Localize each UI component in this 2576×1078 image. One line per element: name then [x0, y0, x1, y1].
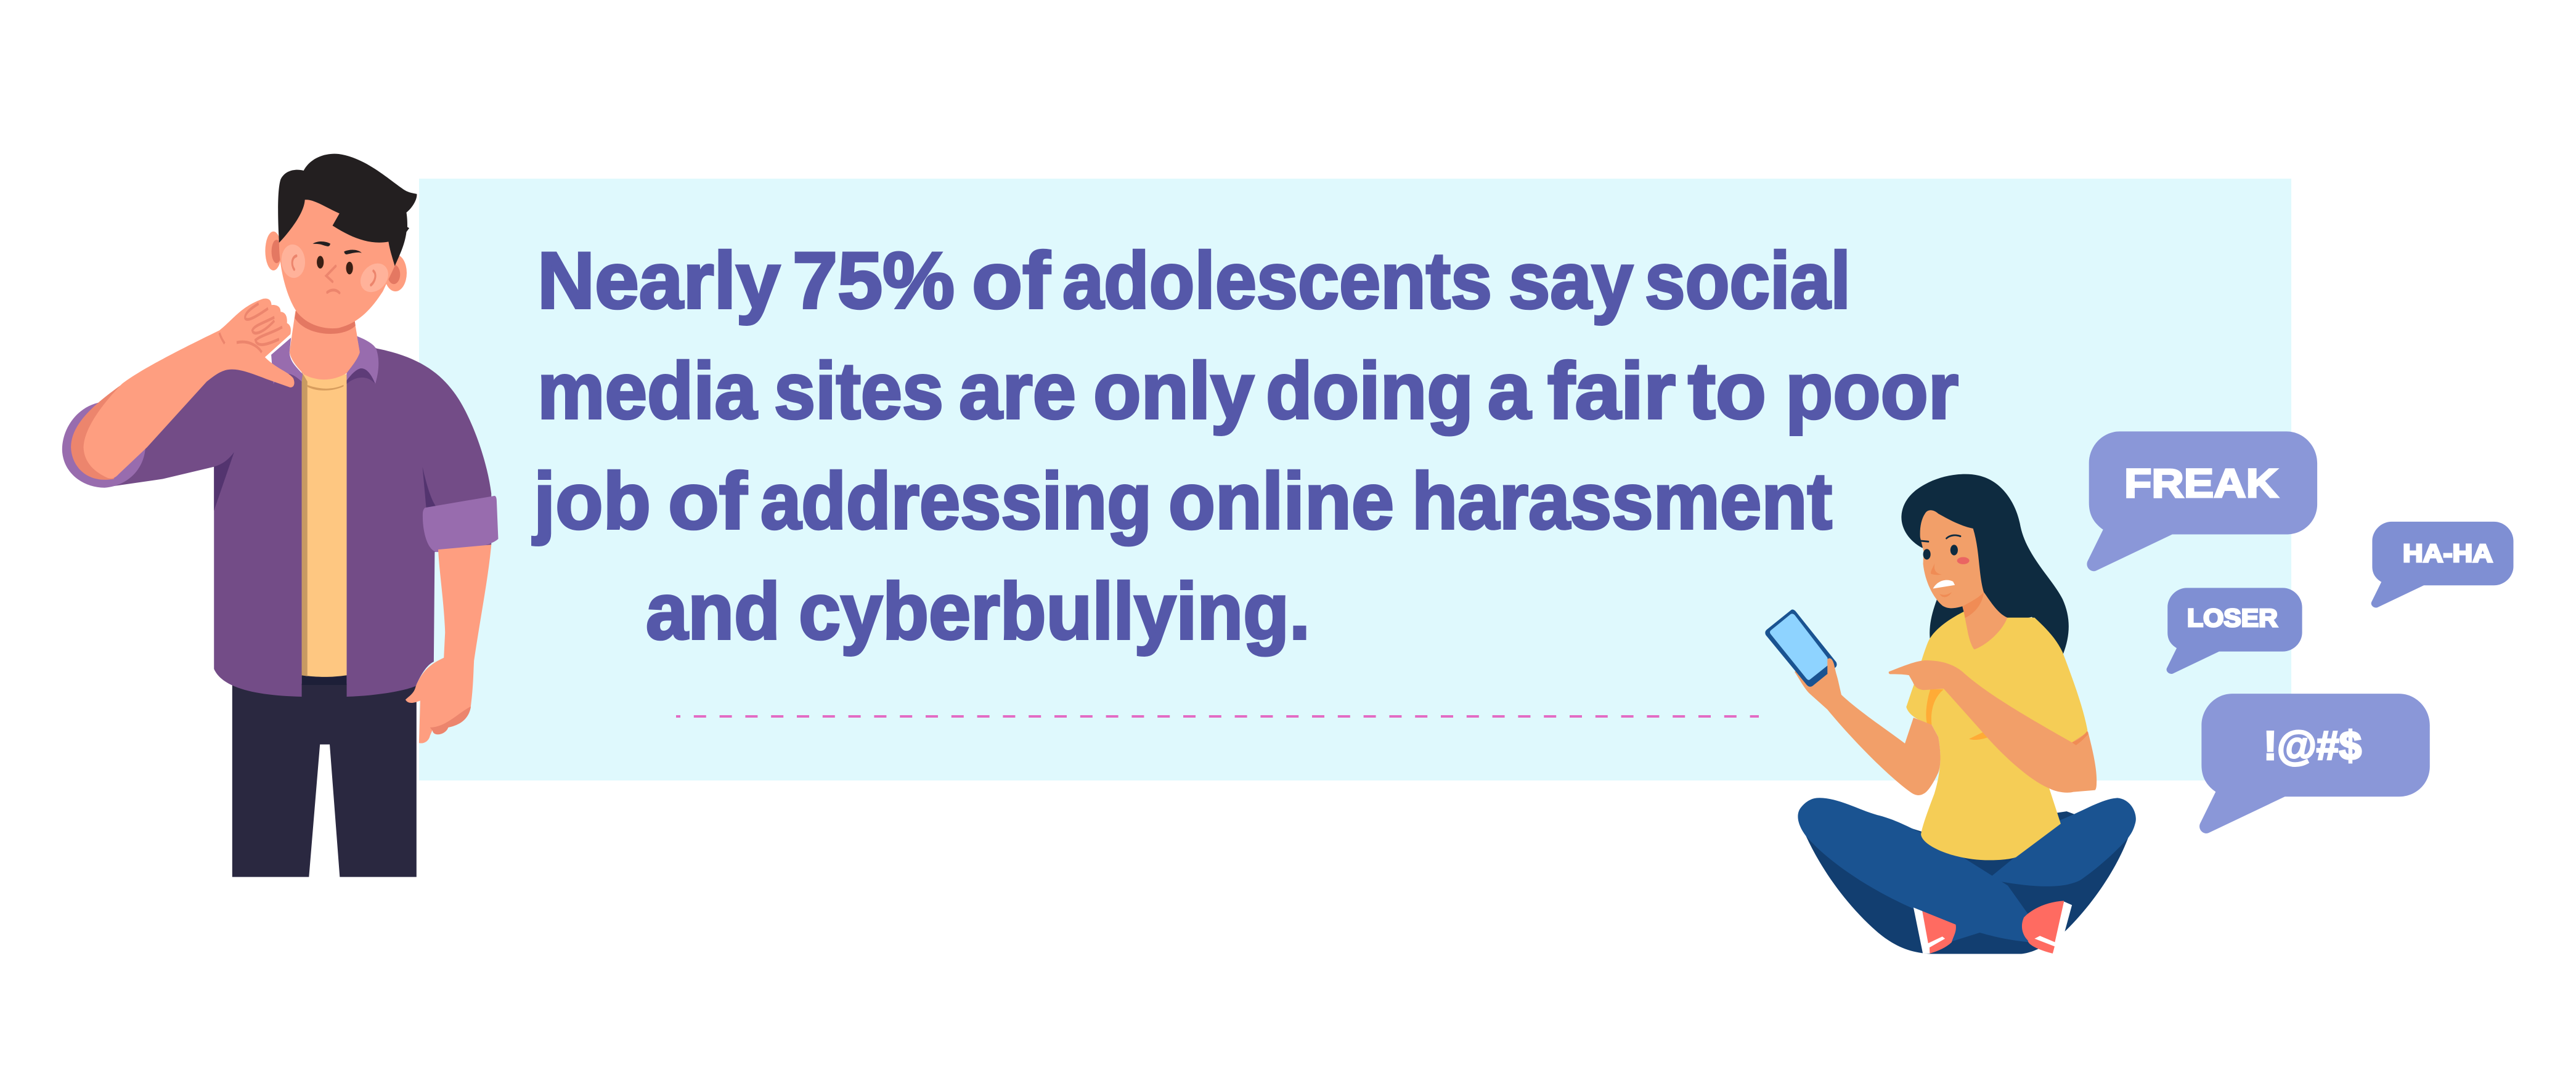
- man: yellow t-shirt: [302, 372, 347, 677]
- speech bubble: LOSER: LOSER: [2187, 604, 2278, 632]
- heading: statistic statement: sites: [774, 346, 944, 436]
- heading: statistic statement: to: [1688, 346, 1766, 436]
- heading: statistic statement: online: [1168, 456, 1394, 546]
- woman: shoes: [1914, 901, 2072, 954]
- heading: statistic statement: cyberbullying.: [799, 566, 1310, 656]
- heading: statistic statement: poor: [1785, 346, 1958, 436]
- speech bubble: symbols: !@#$: [2264, 723, 2362, 768]
- panel: light blue background: [419, 179, 2291, 780]
- heading: statistic statement: Nearly: [537, 235, 780, 325]
- speech bubble: FREAK: FREAK: [2124, 460, 2278, 506]
- woman: hair: [1901, 474, 2069, 654]
- man: thumbs-down arm: [84, 299, 295, 479]
- man: hanging arm: [406, 545, 491, 744]
- heading: statistic statement: [532, 235, 1958, 656]
- woman: neck: [1962, 592, 2007, 649]
- heading: statistic statement: a: [1488, 346, 1532, 436]
- heading: statistic statement: and: [646, 566, 780, 656]
- heading: statistic statement: media: [537, 346, 758, 436]
- heading: statistic statement: adolescents: [1062, 235, 1492, 325]
- woman: crossed legs: [1798, 798, 2136, 954]
- speech bubble: LOSER: [2167, 588, 2302, 674]
- man: sleeve cuff left: [62, 384, 145, 488]
- heading: statistic statement: harassment: [1412, 456, 1832, 546]
- speech bubble: FREAK: [2087, 431, 2317, 571]
- man: rolled sleeve right: [423, 496, 498, 552]
- heading: statistic statement: are: [959, 346, 1076, 436]
- heading: statistic statement: of: [972, 235, 1051, 325]
- woman: yellow top: [1906, 612, 2087, 860]
- speech bubble: HA-HA: HA-HA: [2403, 539, 2493, 567]
- heading: statistic statement: addressing: [760, 456, 1152, 546]
- man: jacket collar: [271, 336, 378, 384]
- heading: statistic statement: social: [1645, 235, 1851, 325]
- man: head: [265, 154, 417, 328]
- speech bubble: HA-HA: [2371, 522, 2513, 608]
- heading: statistic statement: fair: [1547, 346, 1676, 436]
- heading: statistic statement: job: [532, 456, 651, 546]
- man: trousers: [232, 684, 417, 877]
- illustration: seated woman with phone: [1765, 474, 2136, 954]
- heading: statistic statement: say: [1509, 235, 1633, 325]
- heading: statistic statement: 75%: [793, 235, 955, 325]
- man: purple jacket: [112, 338, 491, 697]
- heading: statistic statement: only: [1093, 346, 1254, 436]
- man: neck: [290, 309, 360, 379]
- heading: statistic statement: doing: [1266, 346, 1473, 436]
- illustration: man giving thumbs down: [62, 154, 498, 877]
- woman: face: [1920, 510, 1984, 608]
- speech bubble: symbols: [2199, 694, 2430, 833]
- icon: smartphone: [1765, 610, 1841, 695]
- heading: statistic statement: of: [668, 456, 748, 546]
- woman: arm holding phone: [1795, 659, 1941, 795]
- woman: pointing arm: [1889, 660, 2097, 793]
